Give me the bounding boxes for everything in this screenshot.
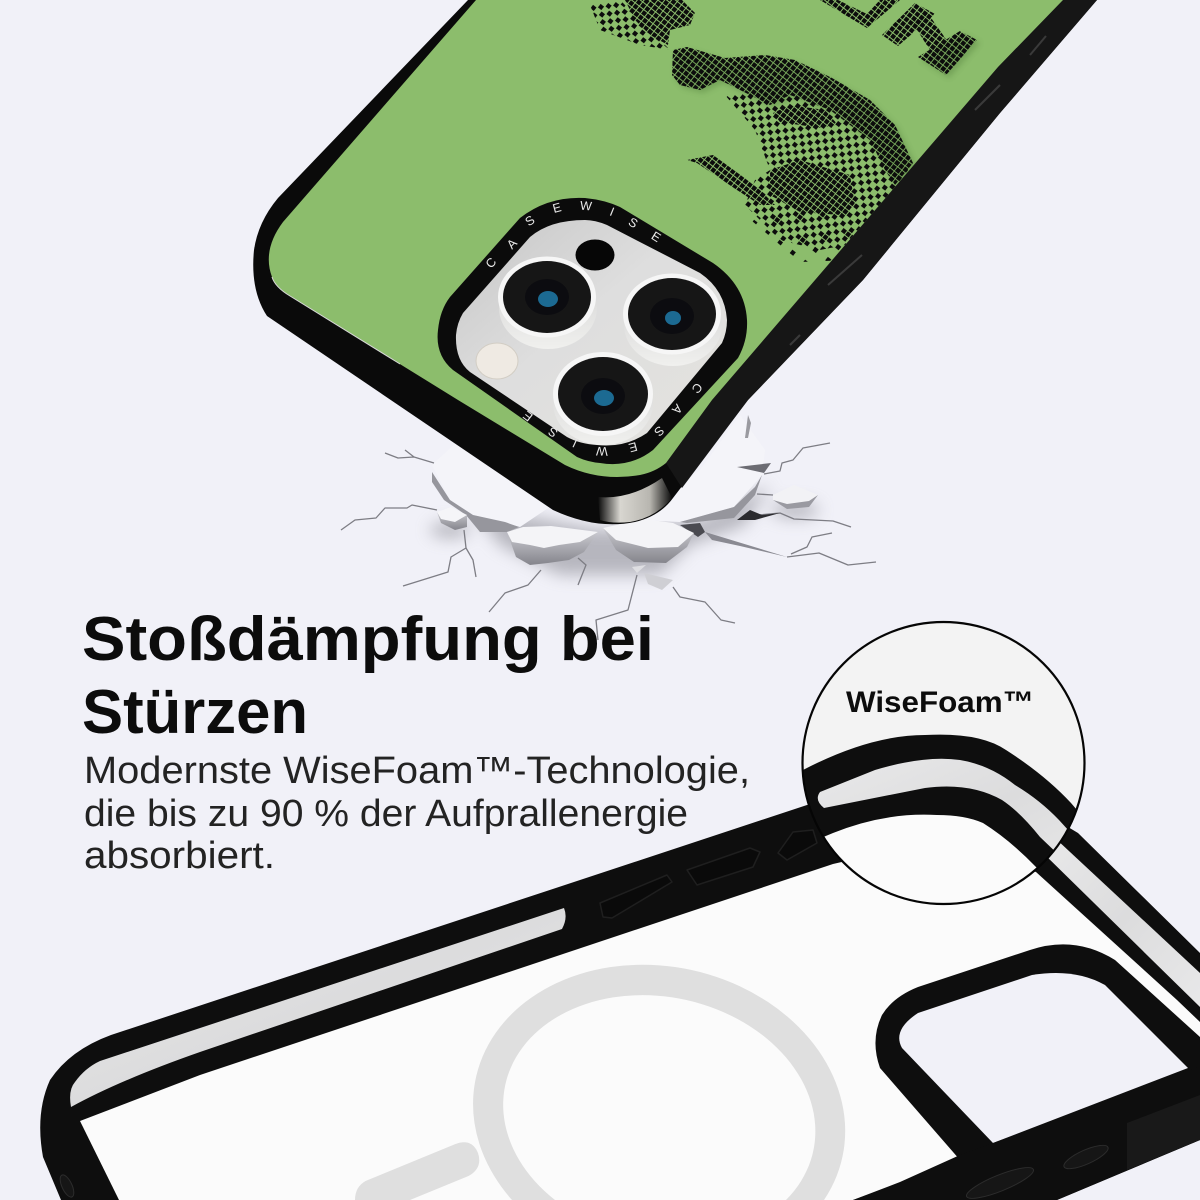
lower hand tail xyxy=(687,155,775,205)
camera ring brand text: E xyxy=(551,200,563,216)
wedge xyxy=(705,532,787,557)
left plate edge xyxy=(432,472,519,532)
side button details xyxy=(790,36,1046,345)
camera ring brand text: S xyxy=(523,213,537,229)
camera island xyxy=(438,198,747,464)
clear case bottom xyxy=(40,762,1200,1200)
rim highlight xyxy=(272,277,400,364)
bumper gloss highlight xyxy=(598,478,672,523)
camera ring brand text: E xyxy=(520,408,536,424)
camera ring brand text: C xyxy=(689,380,705,396)
camera ring brand text: A xyxy=(504,236,520,252)
body text: die bis zu 90 % der Aufprallenergie xyxy=(84,793,688,835)
camera hole xyxy=(576,240,614,270)
camera ring brand text: A xyxy=(669,401,685,417)
bottom bumper xyxy=(853,1067,1200,1200)
camera cutout frame xyxy=(875,944,1200,1160)
lens 3 xyxy=(553,352,653,445)
body text: absorbiert. xyxy=(84,835,275,877)
pixel artwork xyxy=(590,0,980,262)
magnified case corner xyxy=(804,734,1076,868)
magsafe alignment pill xyxy=(355,1142,479,1200)
port holes xyxy=(57,1141,1111,1200)
camera ring brand text: I xyxy=(608,205,616,219)
magnifier outline xyxy=(802,622,1084,904)
camera ring brand text: S xyxy=(651,423,667,439)
WiseFoam label: WiseFoam™ xyxy=(846,686,1034,719)
camera ring brand text: E xyxy=(649,229,663,245)
dark fissures xyxy=(737,510,780,520)
small bottom rocks xyxy=(632,565,673,590)
bumper right side tone xyxy=(666,0,1097,488)
camera cutout opening xyxy=(899,973,1188,1143)
right plate edge xyxy=(680,475,762,523)
top phone with green case xyxy=(253,0,1097,524)
body text: Modernste WiseFoam™-Technologie, xyxy=(84,750,750,792)
button details xyxy=(600,830,817,918)
magnifier fill xyxy=(802,622,1084,904)
lower hand palm xyxy=(770,160,855,215)
camera ring brand text xyxy=(483,199,705,458)
camera ring brand text: W xyxy=(596,444,608,458)
magsafe ring xyxy=(473,965,845,1200)
lens 1 xyxy=(498,256,597,349)
camera ring brand text: E xyxy=(627,439,639,455)
sparse dither xyxy=(590,0,670,50)
crack lines xyxy=(341,443,876,640)
grey window left xyxy=(70,908,566,1107)
case black frame xyxy=(40,762,1200,1200)
green back panel xyxy=(269,0,1063,477)
small left rock xyxy=(437,507,467,530)
crater shadows xyxy=(430,485,819,575)
lens 2 xyxy=(623,274,722,366)
flash xyxy=(476,343,518,379)
centre left rock xyxy=(507,526,598,565)
impact crater with cracks xyxy=(341,415,876,640)
right small rock xyxy=(773,485,818,509)
headline: Stürzen xyxy=(82,678,308,747)
lower hand ridge xyxy=(672,47,913,185)
magnifier with enlarged case detail xyxy=(801,620,1086,906)
letter U xyxy=(820,0,900,28)
letter N xyxy=(882,3,977,75)
camera ring brand text: C xyxy=(483,255,499,271)
artwork shadow xyxy=(675,34,980,188)
camera ring brand text: W xyxy=(580,199,593,214)
bumper tone xyxy=(1127,1095,1200,1170)
phone camera plate xyxy=(456,220,727,446)
raised plate tops xyxy=(432,415,765,527)
camera ring brand text: S xyxy=(626,215,640,231)
upper hand xyxy=(625,0,695,45)
camera ring brand text: S xyxy=(546,424,560,440)
lower hand strip xyxy=(773,105,838,128)
grey window right xyxy=(1040,838,1200,1007)
case black bumper xyxy=(253,0,1097,524)
headline xyxy=(82,605,654,747)
body text xyxy=(84,750,750,877)
camera ring brand text: I xyxy=(570,436,580,450)
headline: Stoßdämpfung bei xyxy=(82,605,654,674)
centre right rock xyxy=(603,519,694,563)
clear interior xyxy=(80,840,1200,1200)
